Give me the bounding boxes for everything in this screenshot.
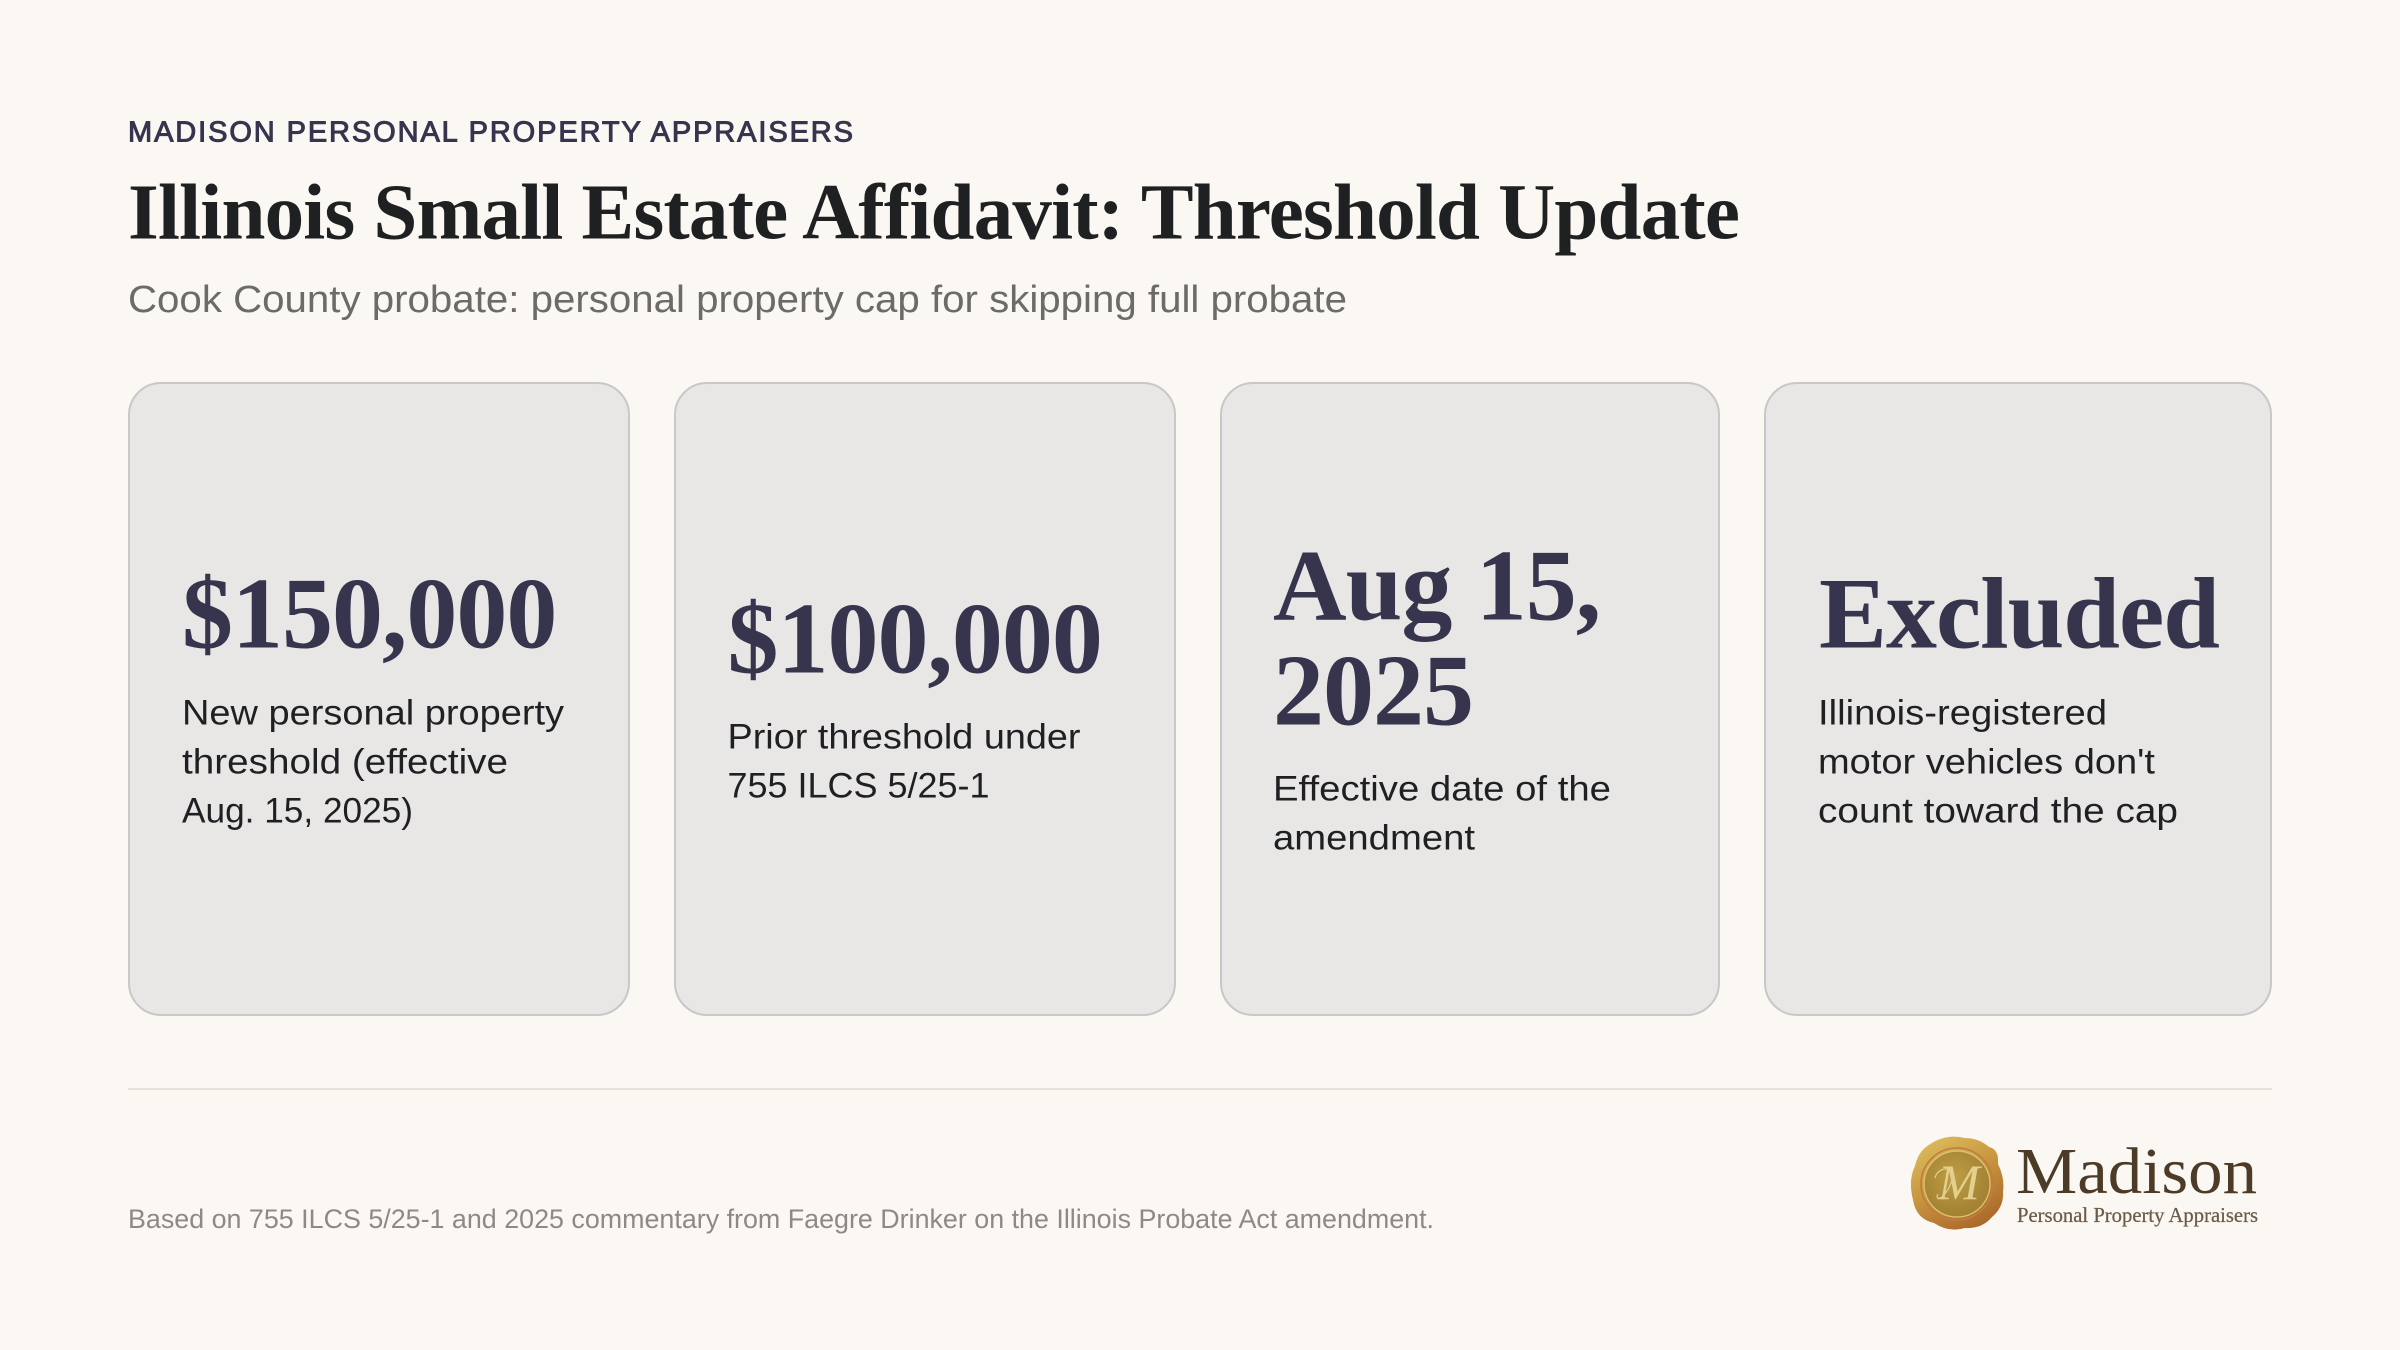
stat value: $100,000: $100,000 <box>728 582 1102 696</box>
stat description: effective date <box>1273 770 1611 858</box>
footer source note: Based on 755 ILCS 5/25-1 and 2025 commentary from Faegre Drinker on the Illinois Probate Act amendment. <box>128 1204 1434 1234</box>
logo tagline: Personal Property Appraisers <box>2017 1203 2258 1227</box>
panel: motor vehicles excluded <box>1765 383 2271 1015</box>
panel: new threshold <box>129 383 629 1015</box>
icon: gold wax seal: M <box>1937 1154 1982 1210</box>
eyebrow: company name: MADISON PERSONAL PROPERTY APPRAISERS <box>128 116 853 148</box>
stat description: new threshold: threshold (effective <box>182 742 508 782</box>
stat description: new threshold: New personal property <box>182 694 565 732</box>
logo wordmark: Madison <box>2016 1135 2257 1208</box>
subtitle: Cook County probate: personal property cap for skipping full probate <box>128 279 1347 321</box>
stat description: effective date: Effective date of the <box>1273 770 1611 808</box>
stat value: $150,000: $150,000 <box>182 558 556 670</box>
stat value: Aug 15, 2025: Aug 15, <box>1273 530 1600 642</box>
icon: gold wax seal <box>1911 1137 2003 1230</box>
stat description: motor vehicles <box>1818 694 2178 830</box>
stat description: new threshold <box>182 694 565 830</box>
stat description: prior threshold: 755 ILCS 5/25-1 <box>728 766 990 806</box>
panel: effective date <box>1221 383 1719 1015</box>
stat description: new threshold: Aug. 15, 2025) <box>182 792 413 830</box>
stat description: motor vehicles: Illinois-registered <box>1818 694 2107 732</box>
stat description: prior threshold <box>728 718 1081 806</box>
panel: prior threshold <box>675 383 1175 1015</box>
stat description: prior threshold: Prior threshold under <box>728 718 1081 756</box>
stat value: Aug 15, 2025 <box>1273 530 1600 748</box>
stat value: Aug 15, 2025: 2025 <box>1273 634 1473 748</box>
stat description: motor vehicles: motor vehicles don't <box>1818 742 2155 782</box>
logo: Madison Personal Property Appraisers <box>1911 1135 2258 1230</box>
stat value: Excluded: Excluded <box>1819 558 2219 670</box>
stat description: motor vehicles: count toward the cap <box>1818 792 2178 830</box>
title: Illinois Small Estate Affidavit: Threshold Update <box>128 170 1740 256</box>
stat description: effective date: amendment <box>1273 818 1475 858</box>
